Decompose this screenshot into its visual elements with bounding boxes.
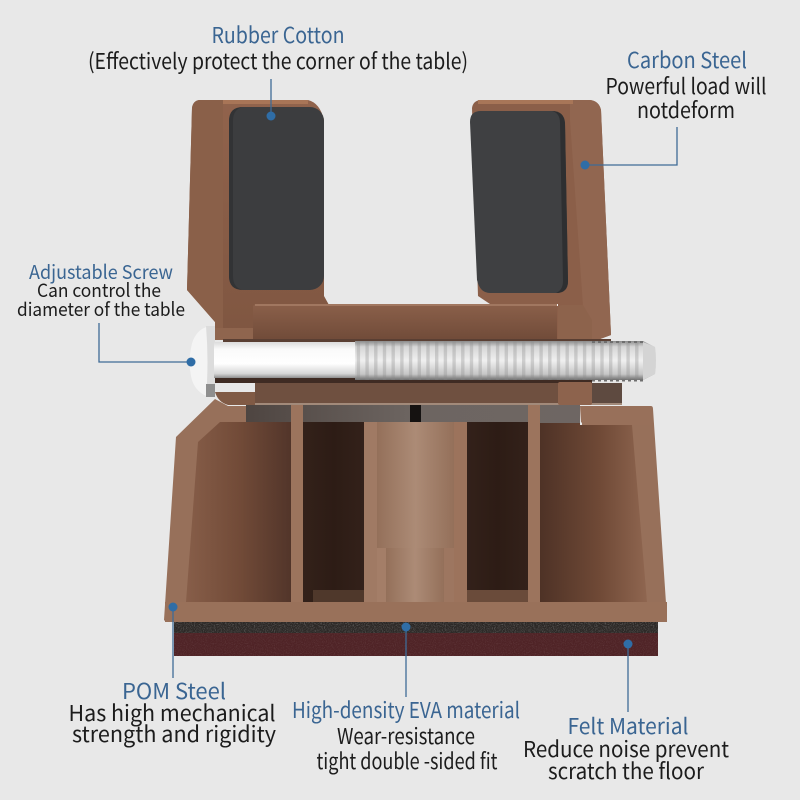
title: carbon steel: Carbon Steel [627,43,747,75]
title: carbon steel [606,43,766,125]
title: rubber cotton: (Effectively protect the corner of the table) [88,44,468,76]
title: EVA material: High-density EVA material [292,693,520,725]
centre rib left [364,422,377,602]
title: POM steel: Has high mechanical [68,696,276,728]
title: EVA material [292,693,520,776]
title: rubber cotton [88,18,468,76]
adjustable screw [190,326,656,397]
title: POM steel: strength and rigidity [72,717,277,749]
right clamp arm [472,100,611,342]
rubber pad right [470,111,568,293]
rib 2 [528,405,540,602]
callout line: POM steel [168,602,178,678]
top right tab [580,406,653,425]
callout line: felt [624,640,632,712]
cavity 2 [303,422,364,602]
title: carbon steel: Powerful load will [606,69,766,101]
title: EVA material: Wear-resistance [337,719,475,751]
cross bar [223,304,611,342]
title: felt material: Reduce noise prevent [523,732,729,764]
title: POM steel: POM Steel [122,674,226,706]
bottom rail [165,602,667,622]
centre cavity [377,422,460,602]
base body [164,399,667,622]
cavity 4 [467,422,528,602]
title: EVA material: tight double -sided fit [316,744,498,776]
centre rib right [454,422,467,602]
left clamp arm [187,100,329,340]
title: carbon steel: notdeform [637,93,735,125]
title: rubber cotton: Rubber Cotton [212,18,344,50]
product: corner bracket [164,100,667,656]
cavity 1 [186,422,291,602]
lower plate under the bolt [215,378,622,405]
rib 1 [291,405,303,602]
cavity 5 [540,423,647,602]
title: adjustable screw: Can control the [37,277,161,303]
callout line: rubber cotton [266,79,276,120]
callout line: carbon steel [580,127,677,170]
title: adjustable screw: diameter of the table [17,296,185,322]
callout line: adjustable screw [99,323,196,366]
felt layer [174,633,658,656]
callout line: EVA [402,622,410,697]
title: felt material: Felt Material [568,709,688,741]
title: felt material [523,709,729,786]
title: adjustable screw: Adjustable Screw [29,258,173,285]
title: adjustable screw [17,258,185,322]
rubber pad left [229,107,324,290]
grey back band [246,405,580,423]
title: POM steel [68,674,277,749]
title: felt material: scratch the floor [548,754,704,786]
EVA layer [174,622,658,633]
